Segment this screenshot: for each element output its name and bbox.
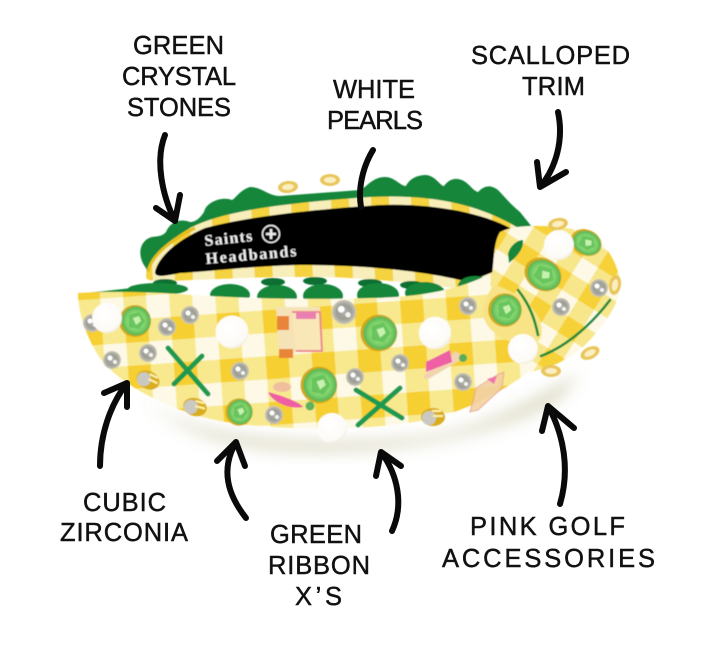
label: green ribbon x's: RIBBON bbox=[268, 552, 370, 580]
green ribbon X's bbox=[168, 348, 402, 425]
knot green piping bbox=[518, 290, 610, 356]
front band gingham bbox=[78, 262, 560, 429]
arrow: cubic zirconia bbox=[100, 383, 127, 466]
front scalloped trim bbox=[78, 276, 492, 309]
knot green scallop bbox=[508, 240, 523, 263]
label: white pearls: WHITE bbox=[333, 76, 415, 104]
golf cart bbox=[276, 307, 322, 358]
arrow: scalloped trim bbox=[537, 112, 566, 187]
label: green crystal stones: CRYSTAL bbox=[122, 63, 236, 91]
brand text second line: Headbands bbox=[205, 243, 297, 268]
golf bag bbox=[268, 382, 314, 410]
second golf cart bbox=[470, 372, 504, 412]
back band scalloped trim bbox=[140, 175, 536, 280]
green crystal stones bbox=[119, 224, 606, 426]
knot bbox=[483, 226, 620, 372]
plus logo bbox=[262, 226, 280, 242]
label: green ribbon x's: X’S bbox=[295, 583, 342, 611]
second golf bag bbox=[423, 350, 467, 379]
pink golf accessories bbox=[268, 307, 504, 412]
label: cubic zirconia: ZIRCONIA bbox=[60, 519, 188, 547]
label: pink golf accessories: PINK GOLF bbox=[470, 513, 625, 541]
cubic zirconia bbox=[83, 279, 608, 424]
gold-set zirconia and beads bbox=[133, 216, 623, 426]
black inner lining bbox=[155, 205, 510, 282]
label: green ribbon x's: GREEN bbox=[270, 521, 362, 549]
headband illustration bbox=[78, 174, 623, 451]
brand label on lining bbox=[204, 226, 297, 268]
arrow: green crystal stones bbox=[156, 135, 180, 221]
white pearls bbox=[92, 230, 574, 443]
label: scalloped trim: TRIM bbox=[522, 73, 585, 101]
back band gingham rim bbox=[146, 196, 525, 292]
label: white pearls: PEARLS bbox=[327, 107, 423, 135]
arrow: white pearls bbox=[360, 150, 373, 207]
arrow: green ribbon left bbox=[217, 442, 246, 518]
label: scalloped trim: SCALLOPED bbox=[471, 42, 630, 70]
small gold beads on back band bbox=[277, 174, 340, 194]
dark scallops under back band bbox=[153, 277, 424, 289]
shadow under headband bbox=[140, 372, 580, 451]
brand text: Saints bbox=[204, 228, 253, 250]
label: green crystal stones: STONES bbox=[127, 94, 231, 122]
arrow: green ribbon right bbox=[376, 452, 401, 531]
arrow: pink golf accessories bbox=[542, 406, 574, 504]
label: green crystal stones: GREEN bbox=[133, 32, 224, 60]
label: cubic zirconia: CUBIC bbox=[83, 489, 166, 517]
label: pink golf accessories: ACCESSORIES bbox=[442, 545, 655, 573]
